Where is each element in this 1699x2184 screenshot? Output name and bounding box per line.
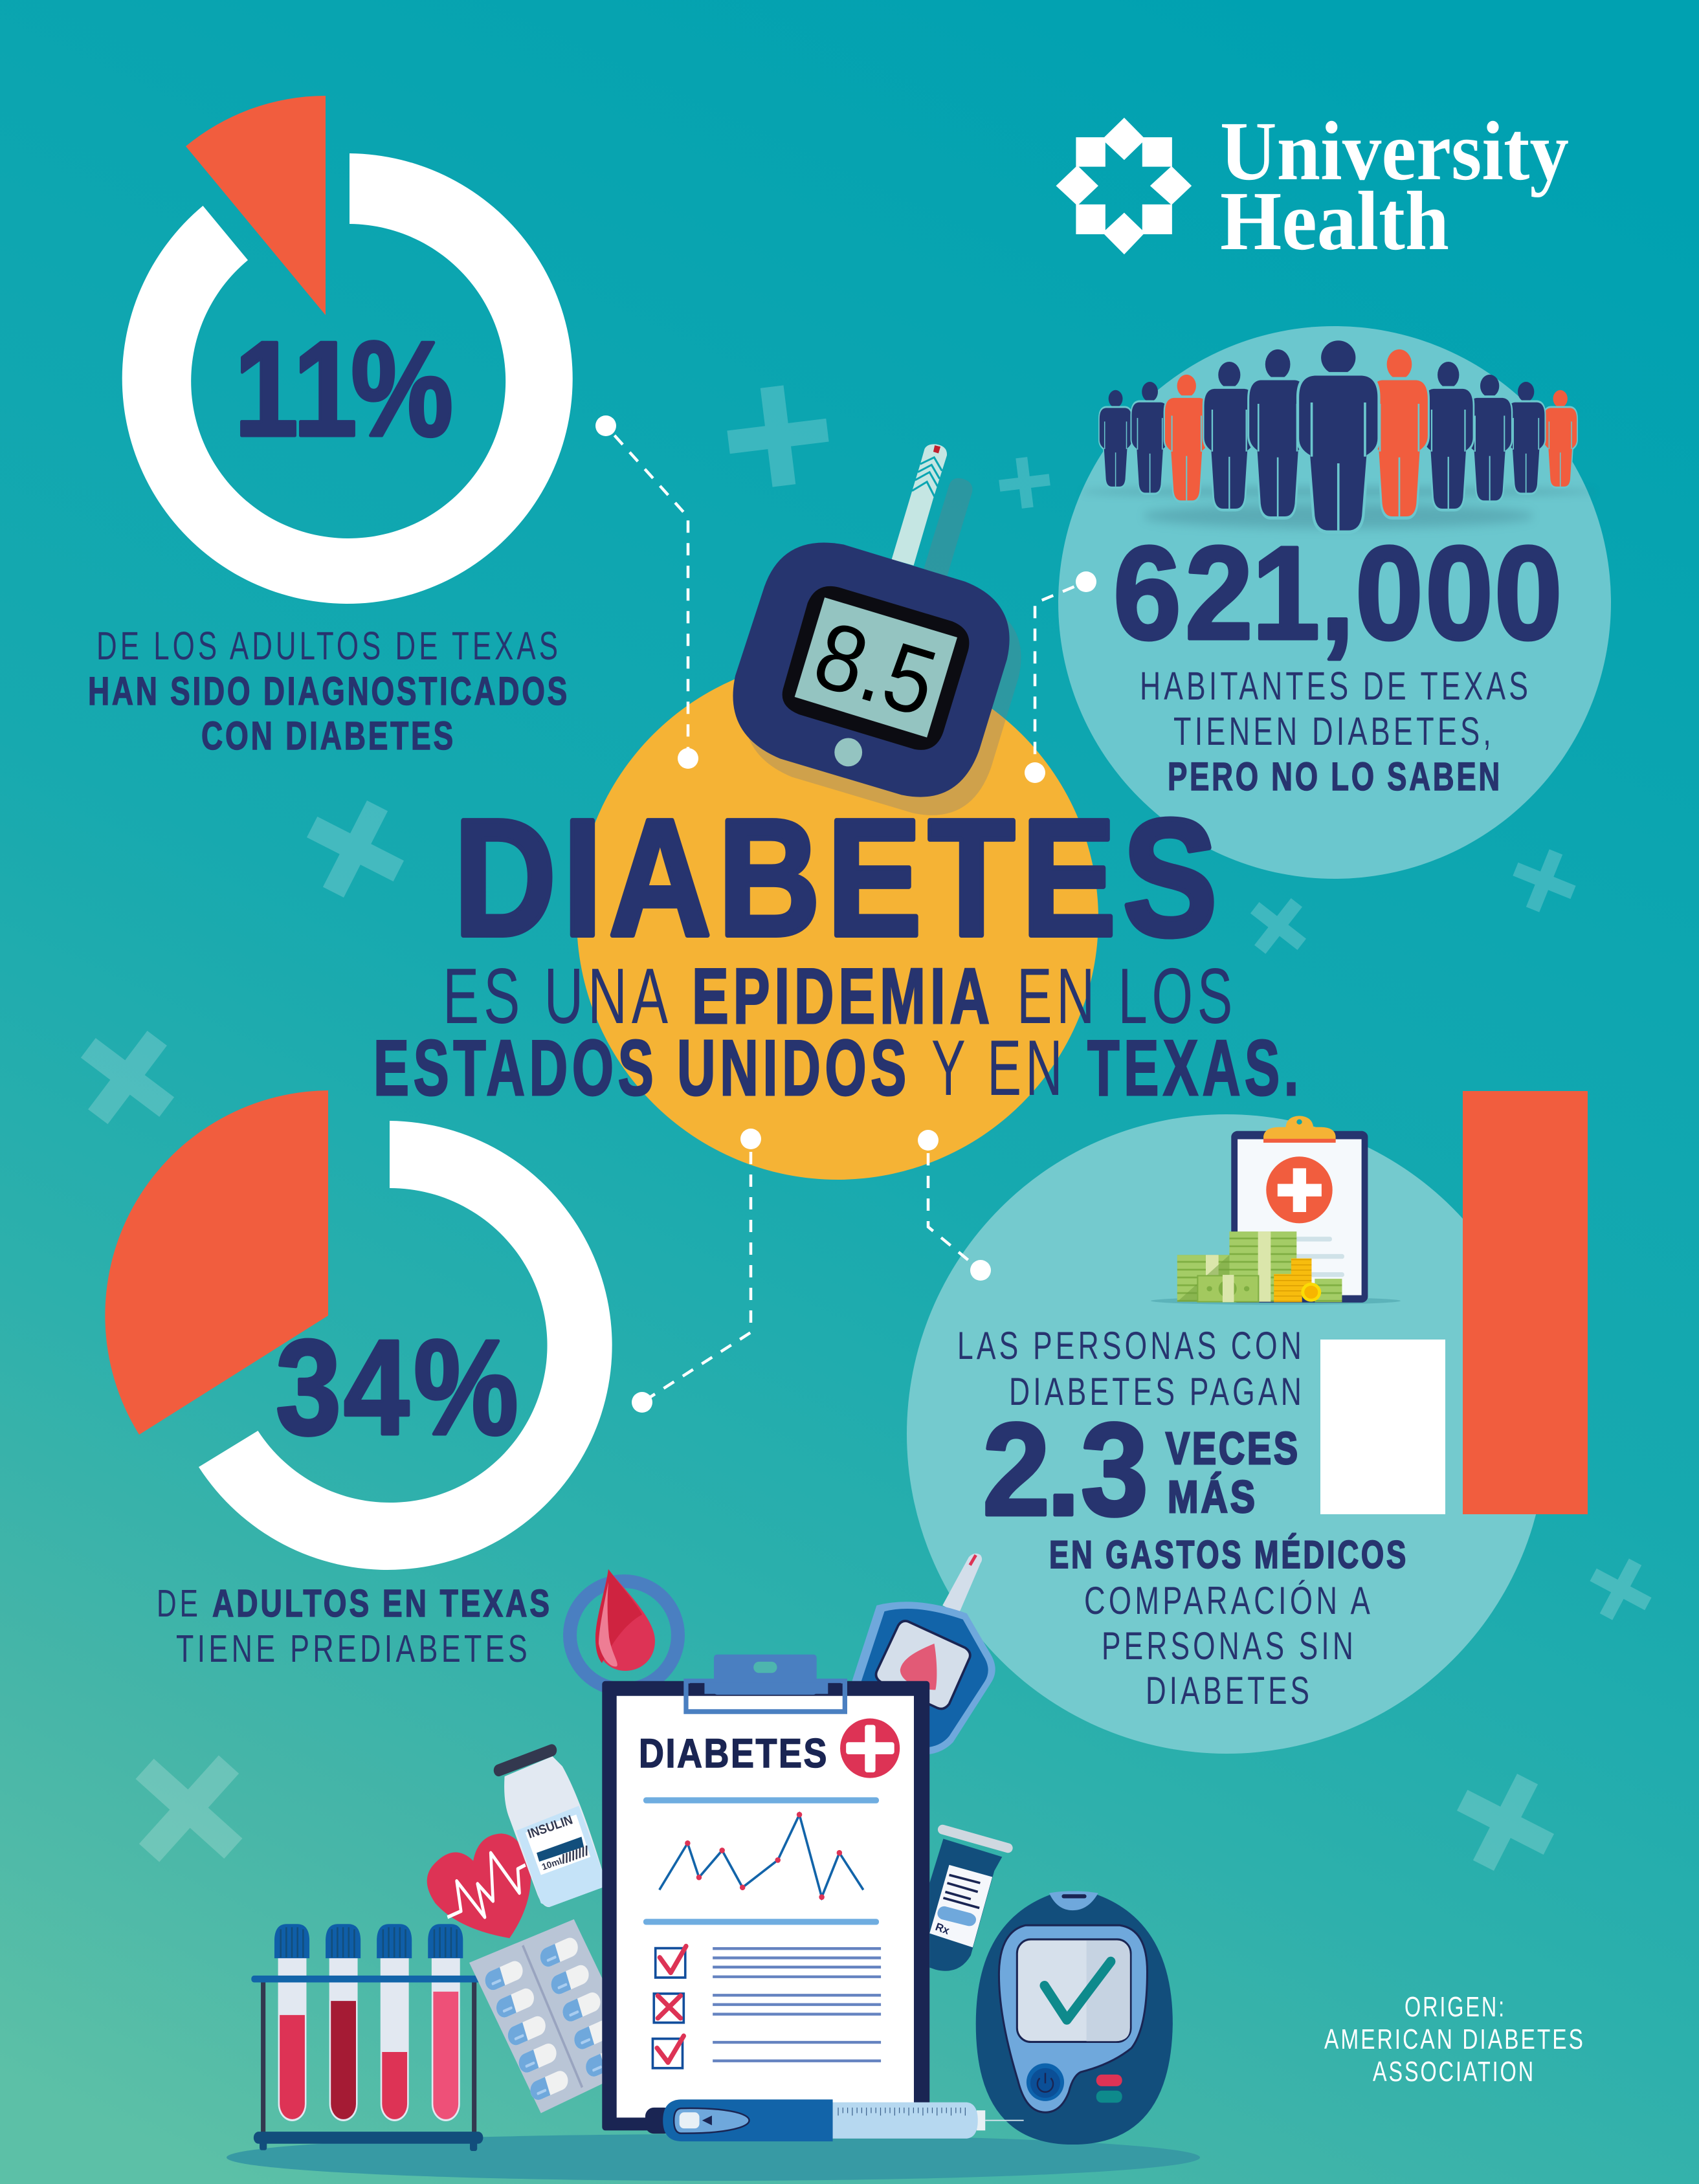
source note: ASSOCIATION — [1373, 2056, 1535, 2088]
clipboard heading: DIABETES — [639, 1731, 828, 1776]
subtitle: TEXAS. — [1087, 1024, 1303, 1112]
source note: AMERICAN DIABETES — [1324, 2024, 1585, 2055]
caption: unaware residents: HABITANTES DE TEXAS — [1140, 664, 1531, 708]
connector: 621,000 to meter — [1025, 571, 1096, 783]
subtitle: EN LOS — [1017, 952, 1237, 1040]
wordmark: University — [1220, 105, 1569, 198]
label: veces mas: VECES — [1166, 1423, 1300, 1473]
panel: 34% donut statistic — [105, 1090, 612, 1670]
panel: 621,000 circle — [1058, 326, 1611, 879]
text: people with diabetes pay — [957, 1324, 1305, 1413]
value: 11%: 11% — [234, 313, 453, 465]
ground shadow — [227, 2134, 1200, 2181]
icon: diabetes clipboard — [602, 1655, 929, 2130]
reading: 8.5: 8.5 — [803, 601, 948, 736]
caption: unaware residents: TIENEN DIABETES, — [1173, 709, 1494, 753]
text: medical expenses comparison: COMPARACIÓN A — [1084, 1579, 1373, 1622]
wordmark: Health — [1220, 175, 1449, 268]
icon: logo star — [1056, 118, 1192, 254]
text: medical expenses comparison: DIABETES — [1146, 1669, 1313, 1712]
caption: unaware residents — [1140, 664, 1531, 799]
source note: ORIGEN: — [1405, 1991, 1506, 2023]
connector: 11% to meter — [595, 415, 698, 769]
text: medical expenses comparison: EN GASTOS MÉDICOS — [1049, 1533, 1408, 1576]
icon: large glucose meter with check — [976, 1891, 1173, 2145]
caption: adults diagnosed: DE LOS ADULTOS DE TEXAS — [96, 624, 561, 668]
caption: adults diagnosed: CON DIABETES — [201, 714, 456, 758]
bar chart: cost comparison — [1320, 1091, 1588, 1514]
donut ring: white — [122, 153, 573, 604]
subtitle: EPIDEMIA — [692, 952, 994, 1040]
icon: heart with ECG and insulin vial — [427, 1750, 604, 1938]
text: medical expenses comparison: PERSONAS SIN — [1102, 1624, 1357, 1668]
icon: crowd of people — [1080, 340, 1597, 531]
donut ring: white — [199, 1121, 612, 1570]
icon: glucose meter 8.5 — [733, 444, 1021, 815]
label: insulin: 10ml — [540, 1855, 563, 1872]
caption: prediabetes: DE — [157, 1582, 201, 1625]
text: people with diabetes pay: LAS PERSONAS CON — [957, 1324, 1305, 1367]
icon: blood drop in ring — [570, 1569, 678, 1689]
panel: 11% donut statistic — [88, 96, 573, 758]
icon: clipboard with money — [1151, 1116, 1401, 1305]
logo: University Health — [1056, 105, 1569, 268]
caption: prediabetes: TIENE PREDIABETES — [176, 1627, 531, 1670]
subtitle: ESTADOS UNIDOS — [373, 1024, 911, 1112]
wordmark — [1220, 105, 1569, 268]
text: medical expenses comparison — [1049, 1533, 1408, 1712]
label: veces mas — [1166, 1423, 1300, 1522]
subtitle — [373, 952, 1303, 1112]
central orange circle — [577, 658, 1098, 1180]
caption: prediabetes — [157, 1582, 552, 1670]
panel: medical cost circle background — [907, 1114, 1546, 1754]
label: insulin — [526, 1813, 575, 1872]
connector: title to 34% — [632, 1129, 761, 1413]
label: Rx: Rx — [934, 1921, 951, 1937]
icon: prescription bottle — [929, 1829, 1008, 1971]
subtitle: Y EN — [931, 1024, 1067, 1112]
text: people with diabetes pay: DIABETES PAGAN — [1009, 1370, 1305, 1413]
caption: adults diagnosed: HAN SIDO DIAGNOSTICADOS — [88, 669, 570, 713]
donut slice: 34% — [105, 1090, 328, 1435]
caption: prediabetes: ADULTOS EN TEXAS — [212, 1582, 552, 1625]
subtitle: ES UNA — [443, 952, 672, 1040]
title: DIABETES: DIABETES — [454, 785, 1224, 971]
label: insulin: INSULIN — [526, 1813, 575, 1842]
source note — [1324, 1991, 1585, 2088]
value: 2.3: 2.3 — [983, 1396, 1148, 1543]
donut slice: 11% — [186, 96, 326, 315]
connector: title to cost — [918, 1130, 991, 1281]
value: 621,000: 621,000 — [1113, 519, 1562, 667]
icon: back glucose meter — [841, 1554, 995, 1754]
test strip — [892, 444, 947, 566]
icon: insulin pen — [645, 2099, 1024, 2141]
icon: blood test tubes in rack — [251, 1924, 485, 2151]
caption: unaware residents: PERO NO LO SABEN — [1168, 755, 1502, 799]
value: 34%: 34% — [276, 1312, 518, 1463]
panel: medical costs — [957, 1091, 1588, 1712]
decorative crosses — [59, 381, 1663, 1893]
circle background — [1058, 326, 1611, 879]
icon: blister pack of pills — [469, 1919, 643, 2113]
label: veces mas: MÁS — [1168, 1472, 1258, 1522]
caption: adults diagnosed — [88, 624, 570, 758]
